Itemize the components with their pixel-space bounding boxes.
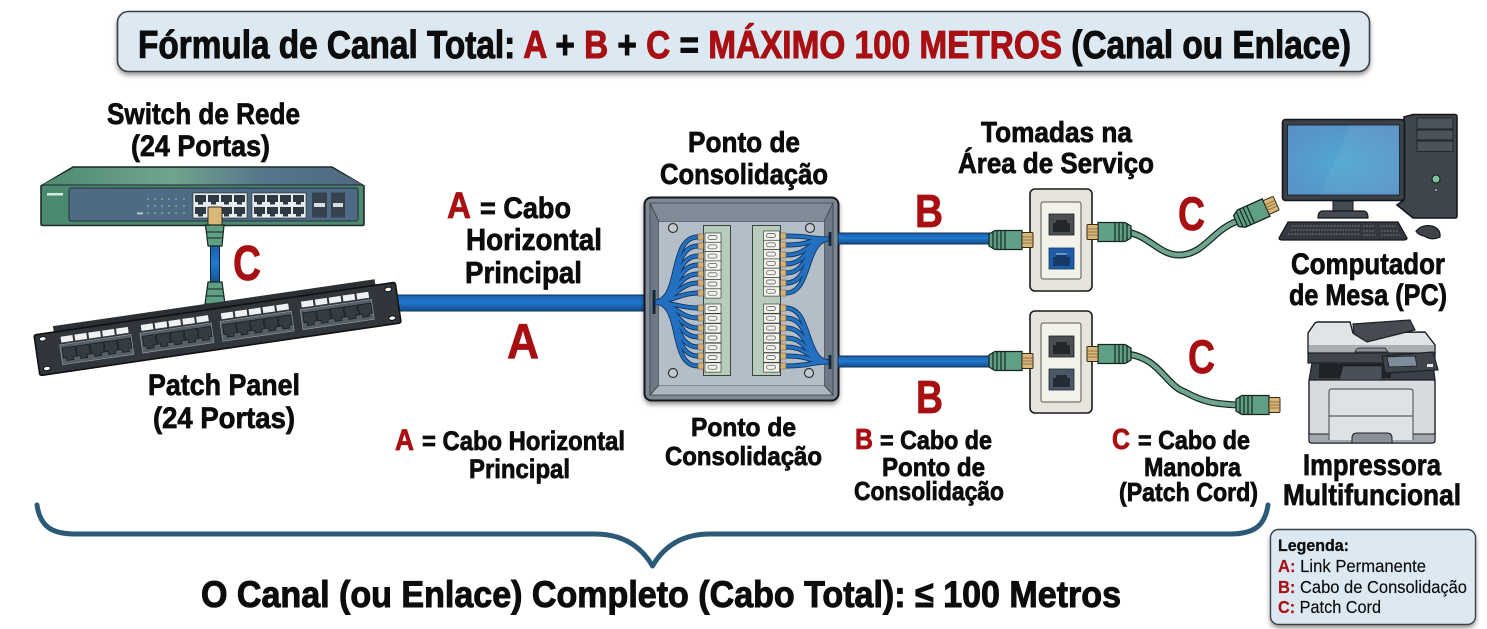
heading: tomadas: Área de Serviço <box>958 146 1154 180</box>
label: C = Cabo de Manobra <box>1112 424 1258 507</box>
heading: impressora <box>1283 449 1461 512</box>
label: A = Cabo Horizontal Principal (upper) <box>447 185 602 290</box>
label: B = Cabo de Ponto de Consolidacao: Consolidação <box>854 476 1004 506</box>
heading: tomadas <box>958 117 1154 180</box>
label: C: C <box>233 237 261 291</box>
legend box <box>1270 530 1476 624</box>
brace: full channel span <box>37 505 1268 566</box>
heading: tomadas: Tomadas na <box>981 117 1133 149</box>
heading: switch de rede <box>107 98 300 163</box>
cable B lower <box>838 356 990 367</box>
legend box: B: Cabo de Consolidação <box>1278 577 1467 597</box>
heading: switch de rede: Switch de Rede <box>107 98 300 131</box>
label: A = Cabo Horizontal Principal (upper): Principal <box>465 255 582 290</box>
caption: full channel: O Canal (ou Enlace) Completo (Cabo Total): ≤ 100 Metros <box>201 574 1121 615</box>
label: C = Cabo de Manobra: (Patch Cord) <box>1119 477 1258 507</box>
label: A = Cabo Horizontal Principal (lower) <box>395 424 625 484</box>
terminal strip right <box>752 226 780 376</box>
fan-out wires <box>654 232 830 369</box>
icon: wall outlet lower <box>1030 311 1092 413</box>
label: A = Cabo Horizontal Principal (upper): = Cabo <box>480 192 571 225</box>
heading: ponto de consolidacao lower <box>665 412 822 471</box>
legend box: Legenda: <box>1278 536 1349 555</box>
heading: patch panel: (24 Portas) <box>153 402 295 435</box>
heading: computador <box>1289 248 1447 312</box>
label: A = Cabo Horizontal Principal (upper): A <box>447 185 471 226</box>
label: B = Cabo de Ponto de Consolidacao: B <box>855 424 873 456</box>
icon: network switch <box>41 167 364 226</box>
icon: wall outlet upper <box>1030 189 1092 291</box>
heading: ponto de consolidacao: Consolidação <box>660 159 828 191</box>
label: A = Cabo Horizontal Principal (lower): = Cabo Horizontal <box>422 426 625 456</box>
heading: patch panel: Patch Panel <box>148 369 300 402</box>
label: A = Cabo Horizontal Principal (upper): Horizontal <box>466 222 602 257</box>
label: B = Cabo de Ponto de Consolidacao <box>854 424 1004 506</box>
patch cord C lower <box>989 344 1280 414</box>
wire connectors <box>698 233 786 369</box>
patch cord C between switch and panel <box>205 207 225 304</box>
heading: computador: Computador <box>1291 248 1445 281</box>
heading: ponto de consolidacao lower: Ponto de <box>691 412 796 442</box>
label: C upper: C <box>1178 187 1205 240</box>
label: A: A <box>507 315 539 369</box>
label: B upper: B <box>915 185 943 237</box>
heading: impressora: Multifuncional <box>1283 479 1461 512</box>
heading: patch panel <box>148 369 300 435</box>
cable B upper <box>838 233 990 244</box>
icon: multifunction printer <box>1308 320 1438 443</box>
label: C = Cabo de Manobra: C <box>1112 424 1130 456</box>
title banner: Fórmula de Canal Total: A + B + C = MÁXIMO 100 METROS (Canal ou Enlace) <box>138 23 1351 67</box>
icon: desktop computer <box>1279 114 1457 240</box>
heading: ponto de consolidacao: Ponto de <box>688 127 800 159</box>
legend box: C: Patch Cord <box>1278 597 1381 617</box>
label: B = Cabo de Ponto de Consolidacao: = Cabo de <box>880 425 992 455</box>
heading: ponto de consolidacao <box>660 127 828 191</box>
cable A <box>392 295 648 311</box>
heading: ponto de consolidacao lower: Consolidação <box>665 441 822 471</box>
title banner <box>118 12 1370 72</box>
label: A = Cabo Horizontal Principal (lower): Principal <box>469 454 570 484</box>
legend box: A: Link Permanente <box>1278 556 1426 576</box>
heading: switch de rede: (24 Portas) <box>131 130 270 163</box>
label: B = Cabo de Ponto de Consolidacao: Ponto de <box>882 452 985 482</box>
label: A = Cabo Horizontal Principal (lower): A <box>395 424 414 457</box>
terminal strip left <box>704 226 730 376</box>
heading: impressora: Impressora <box>1303 449 1441 482</box>
label: C = Cabo de Manobra: = Cabo de <box>1138 425 1250 455</box>
icon: consolidation box <box>644 198 838 400</box>
icon: patch panel <box>33 276 401 376</box>
label: C lower: C <box>1188 330 1215 383</box>
patch cord C upper <box>989 194 1280 255</box>
heading: computador: de Mesa (PC) <box>1289 279 1447 312</box>
label: B lower: B <box>916 371 943 423</box>
label: C = Cabo de Manobra: Manobra <box>1144 452 1241 482</box>
